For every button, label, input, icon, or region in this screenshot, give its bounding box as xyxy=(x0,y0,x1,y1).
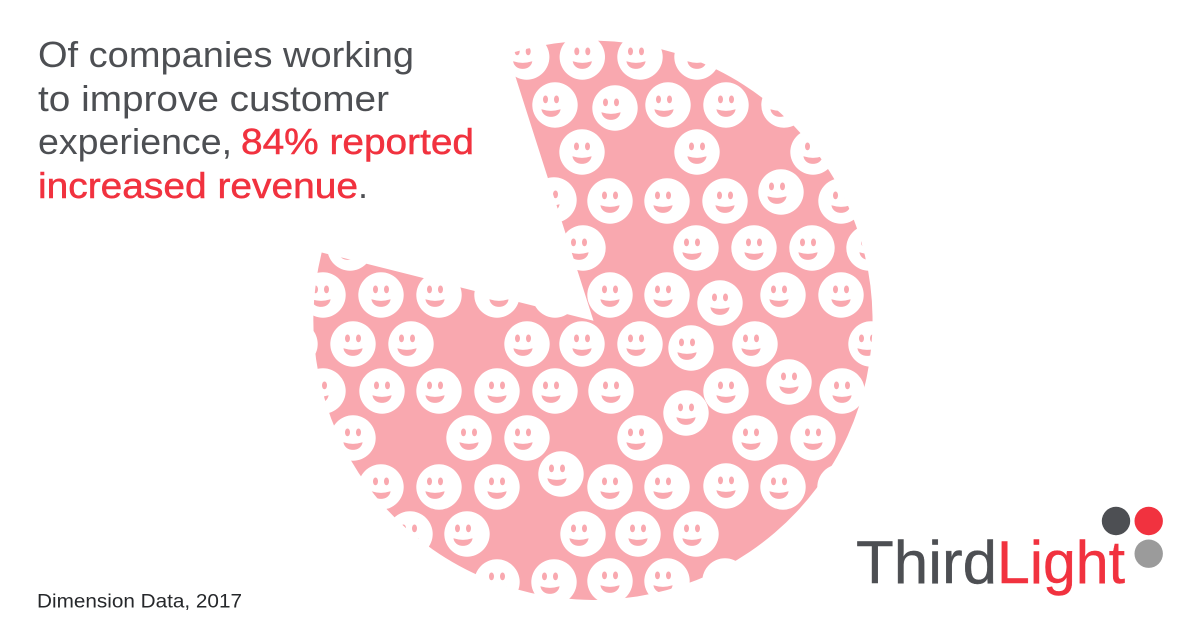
headline text: 84% reported xyxy=(241,121,474,162)
logo: ThirdLight xyxy=(856,507,1163,596)
headline text: increased revenue xyxy=(38,165,358,206)
logo wordmark xyxy=(856,529,1125,596)
smiley face eyes and mouths xyxy=(309,48,879,594)
headline text: experience, xyxy=(38,121,232,162)
headline text: Of companies working xyxy=(38,34,414,75)
source note: Dimension Data, 2017 xyxy=(37,592,242,612)
pie slice xyxy=(313,41,873,600)
headline text xyxy=(38,34,474,206)
logo dots xyxy=(1102,507,1163,568)
logo wordmark: Light xyxy=(997,529,1125,596)
headline text: to improve customer xyxy=(38,78,389,119)
headline text: . xyxy=(358,165,368,206)
logo wordmark: Third xyxy=(856,529,997,596)
smiley face discs xyxy=(272,34,894,605)
pie chart: 84% filled with smiley faces xyxy=(313,40,872,600)
